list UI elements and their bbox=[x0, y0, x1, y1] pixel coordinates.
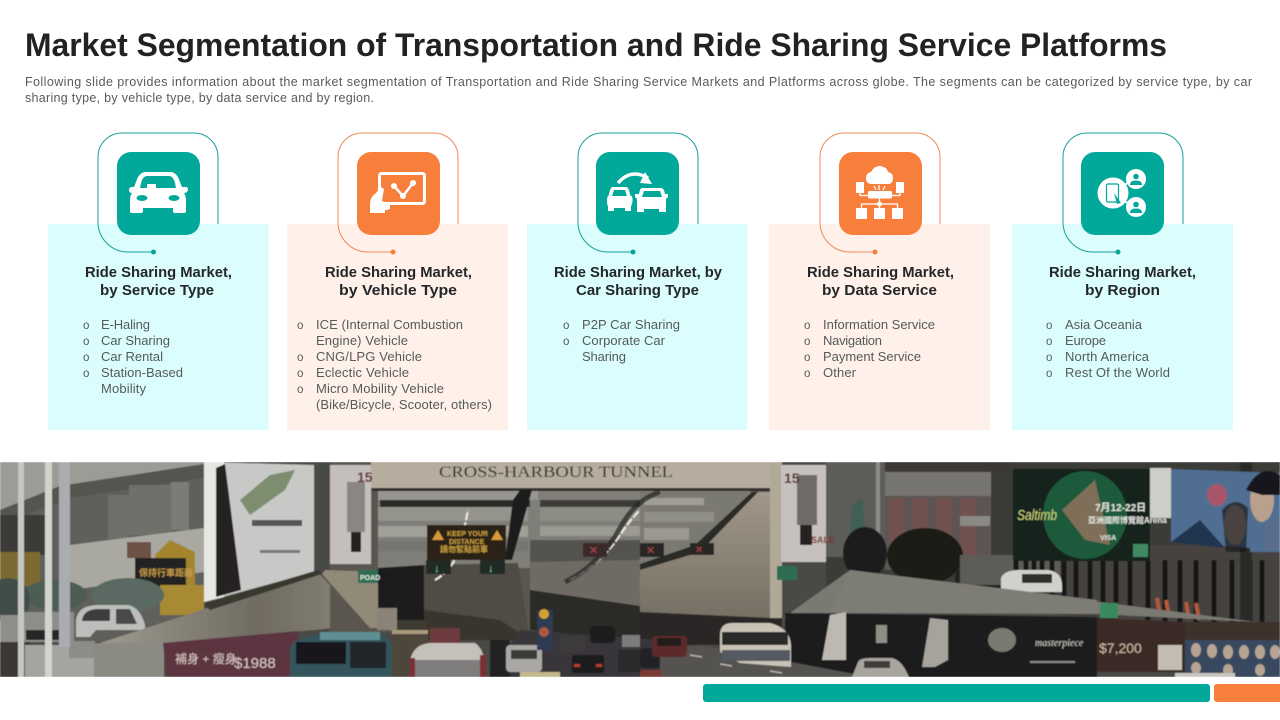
list: Car Sharing bbox=[101, 333, 170, 348]
heading: by Vehicle Type bbox=[339, 283, 457, 299]
intro text: sharing type, by vehicle type, by data service and by region. bbox=[25, 91, 374, 105]
photo: left tunnel poster bbox=[330, 465, 373, 564]
photo: left roof and banner bbox=[94, 570, 330, 677]
icon: cloud network bbox=[856, 166, 904, 219]
heading bbox=[85, 265, 232, 299]
photo: cross-harbour tunnel traffic bbox=[0, 462, 1280, 677]
footer bar: orange bbox=[1214, 684, 1280, 702]
photo: road and traffic bbox=[290, 608, 909, 677]
list: Asia Oceania bbox=[1065, 317, 1143, 332]
list bbox=[297, 317, 492, 412]
photo right: sloped roof and hoardings: $7,200 bbox=[1099, 640, 1142, 656]
list: Navigation bbox=[823, 333, 882, 348]
list: o bbox=[83, 336, 89, 348]
list: o bbox=[1046, 368, 1052, 380]
list: Corporate Car bbox=[582, 333, 666, 348]
heading: by Data Service bbox=[822, 283, 937, 299]
panel: by car sharing type bbox=[527, 133, 748, 430]
list bbox=[1046, 317, 1170, 380]
list: Information Service bbox=[823, 317, 935, 332]
list: o bbox=[297, 384, 303, 396]
list: Engine) Vehicle bbox=[316, 333, 408, 348]
photo: green show billboard: 7月12-22日 bbox=[1095, 502, 1146, 514]
list bbox=[83, 317, 183, 396]
photo: left roof and banner: 補身 + 瘦身 bbox=[175, 651, 237, 666]
list: Mobility bbox=[101, 381, 146, 396]
photo: tunnel portal: CROSS-HARBOUR TUNNEL bbox=[439, 464, 673, 481]
panel: by vehicle type bbox=[287, 133, 508, 430]
heading: by Service Type bbox=[100, 283, 214, 299]
list: o bbox=[1046, 320, 1052, 332]
photo: tunnel portal: 請勿緊貼前車 bbox=[440, 544, 488, 554]
photo: tunnel portal bbox=[322, 462, 782, 645]
heading: Car Sharing Type bbox=[576, 283, 699, 299]
panel: by service type bbox=[48, 133, 268, 430]
list: o bbox=[563, 320, 569, 332]
heading bbox=[1049, 265, 1196, 299]
heading: Ride Sharing Market, bbox=[85, 265, 232, 281]
list: (Bike/Bicycle, Scooter, others) bbox=[316, 397, 492, 412]
list: o bbox=[83, 320, 89, 332]
photo: right tunnel poster: SALE bbox=[811, 535, 835, 545]
title: Market Segmentation of Transportation and Ride Sharing Service Platforms bbox=[25, 27, 1167, 63]
intro text: Following slide provides information about the market segmentation of Transportation and Ride Sharing Service Markets and Platforms across globe. The segments can be categorized by service type, by car bbox=[25, 75, 1252, 89]
list: o bbox=[804, 336, 810, 348]
panel: by data service bbox=[769, 133, 990, 430]
list: o bbox=[1046, 336, 1052, 348]
list: o bbox=[83, 368, 89, 380]
photo: tunnel portal: POAD bbox=[360, 575, 380, 582]
photo: green show billboard bbox=[1013, 469, 1167, 561]
list: Sharing bbox=[582, 349, 626, 364]
photo: tunnel portal: ↓ bbox=[488, 563, 494, 575]
photo: tunnel portal: ✕ bbox=[695, 545, 703, 556]
photo: large billboard bbox=[204, 462, 314, 602]
icon: car bbox=[129, 172, 188, 213]
list: o bbox=[297, 368, 303, 380]
photo: right tunnel poster bbox=[777, 465, 835, 580]
photo: tunnel portal: ✕ bbox=[646, 545, 655, 557]
list: Car Rental bbox=[101, 349, 163, 364]
photo: tunnel portal: ↓ bbox=[434, 563, 440, 575]
photo left: overpass and roadworks: 保持行車距離 bbox=[139, 567, 193, 578]
photo: green show billboard: VISA bbox=[1100, 535, 1116, 542]
photo: left tunnel poster: 15 bbox=[357, 469, 373, 485]
list: North America bbox=[1065, 349, 1150, 364]
photo: tunnel portal: KEEP YOUR bbox=[447, 531, 488, 538]
icon: tablet and hand bbox=[370, 174, 424, 213]
photo: tunnel portal: ✕ bbox=[589, 545, 598, 557]
list: Station-Based bbox=[101, 365, 183, 380]
photo: left roof and banner: $1988 bbox=[234, 655, 276, 672]
photo: blue concert billboard bbox=[1171, 469, 1280, 552]
list: o bbox=[83, 352, 89, 364]
footer bar: teal bbox=[703, 684, 1210, 702]
list: o bbox=[1046, 352, 1052, 364]
photo left: overpass and roadworks bbox=[0, 462, 204, 677]
list: Eclectic Vehicle bbox=[316, 365, 409, 380]
list: Payment Service bbox=[823, 349, 921, 364]
heading: Ride Sharing Market, bbox=[807, 265, 954, 281]
list: E-Haling bbox=[101, 317, 150, 332]
photo right: sloped roof and hoardings: masterpiece bbox=[1035, 638, 1084, 649]
photo: tunnel portal: DISTANCE bbox=[449, 539, 485, 546]
list bbox=[804, 317, 935, 380]
list: Europe bbox=[1065, 333, 1106, 348]
list: Micro Mobility Vehicle bbox=[316, 381, 444, 396]
photo: green show billboard: Saltimb bbox=[1017, 507, 1057, 524]
photo right: buildings and fence bbox=[826, 462, 1280, 640]
list: o bbox=[804, 320, 810, 332]
list: o bbox=[297, 352, 303, 364]
photo right: sloped roof and hoardings bbox=[783, 570, 1280, 677]
heading: Ride Sharing Market, by bbox=[554, 265, 722, 281]
list: CNG/LPG Vehicle bbox=[316, 349, 422, 364]
list: o bbox=[804, 352, 810, 364]
icon: shared network bbox=[1098, 169, 1146, 217]
heading bbox=[807, 265, 954, 299]
list: o bbox=[563, 336, 569, 348]
list: Rest Of the World bbox=[1065, 365, 1170, 380]
heading bbox=[325, 265, 472, 299]
list: Other bbox=[823, 365, 857, 380]
heading: Ride Sharing Market, bbox=[1049, 265, 1196, 281]
photo: green show billboard: 亞洲國際博覽館Arena bbox=[1088, 515, 1167, 525]
list bbox=[563, 317, 680, 364]
heading: Ride Sharing Market, bbox=[325, 265, 472, 281]
heading bbox=[554, 265, 722, 299]
panel: by region bbox=[1012, 133, 1233, 430]
intro text bbox=[25, 75, 1252, 105]
list: o bbox=[297, 320, 303, 332]
list: P2P Car Sharing bbox=[582, 317, 680, 332]
list: ICE (Internal Combustion bbox=[316, 317, 463, 332]
heading: by Region bbox=[1085, 283, 1160, 299]
icon: two cars with arrow bbox=[607, 172, 668, 212]
list: o bbox=[804, 368, 810, 380]
photo: right tunnel poster: 15 bbox=[784, 470, 800, 486]
